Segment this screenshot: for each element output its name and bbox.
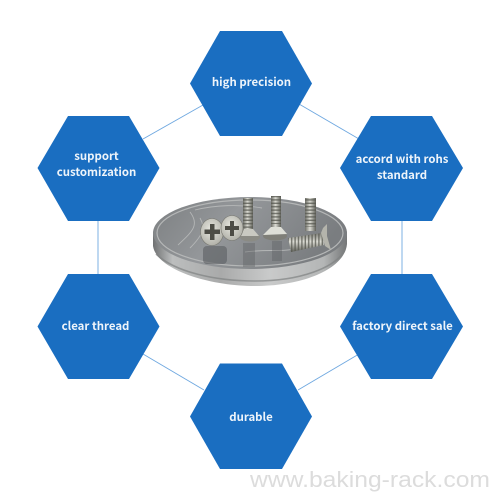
hexagon: durable [190,364,312,469]
reflections [203,246,227,264]
connector lines [98,104,402,390]
coin face [153,197,347,269]
hexagon: support customization: support [74,148,119,164]
screw: upright 3 [305,198,316,231]
screw head 2 [221,216,243,240]
hexagon: clear thread: clear thread [62,318,129,334]
hexagon: clear thread [38,274,160,379]
coin engraving [178,206,312,252]
screw: upright 2 [263,196,287,240]
hexagon: support customization: customization [57,164,136,180]
hexagon: support customization [38,116,160,221]
hexagon: durable: durable [229,409,273,425]
hexagon: accord with rohs standard: standard [377,167,427,183]
hexagon: accord with rohs standard [340,116,463,221]
watermark: www.baking-rack.com [249,467,490,492]
hexagon: accord with rohs standard: accord with rohs [356,151,449,167]
photo: coin with screws [153,196,347,286]
screw head 1 [200,218,224,246]
coin edge [153,232,347,286]
screw: upright 1 [240,198,260,242]
hexagon: factory direct sale: factory direct sale [352,318,453,334]
screw: lying [288,224,331,252]
hexagon: high precision [190,31,312,136]
hexagon: high precision: high precision [212,74,291,90]
hexagon: factory direct sale [340,274,463,379]
